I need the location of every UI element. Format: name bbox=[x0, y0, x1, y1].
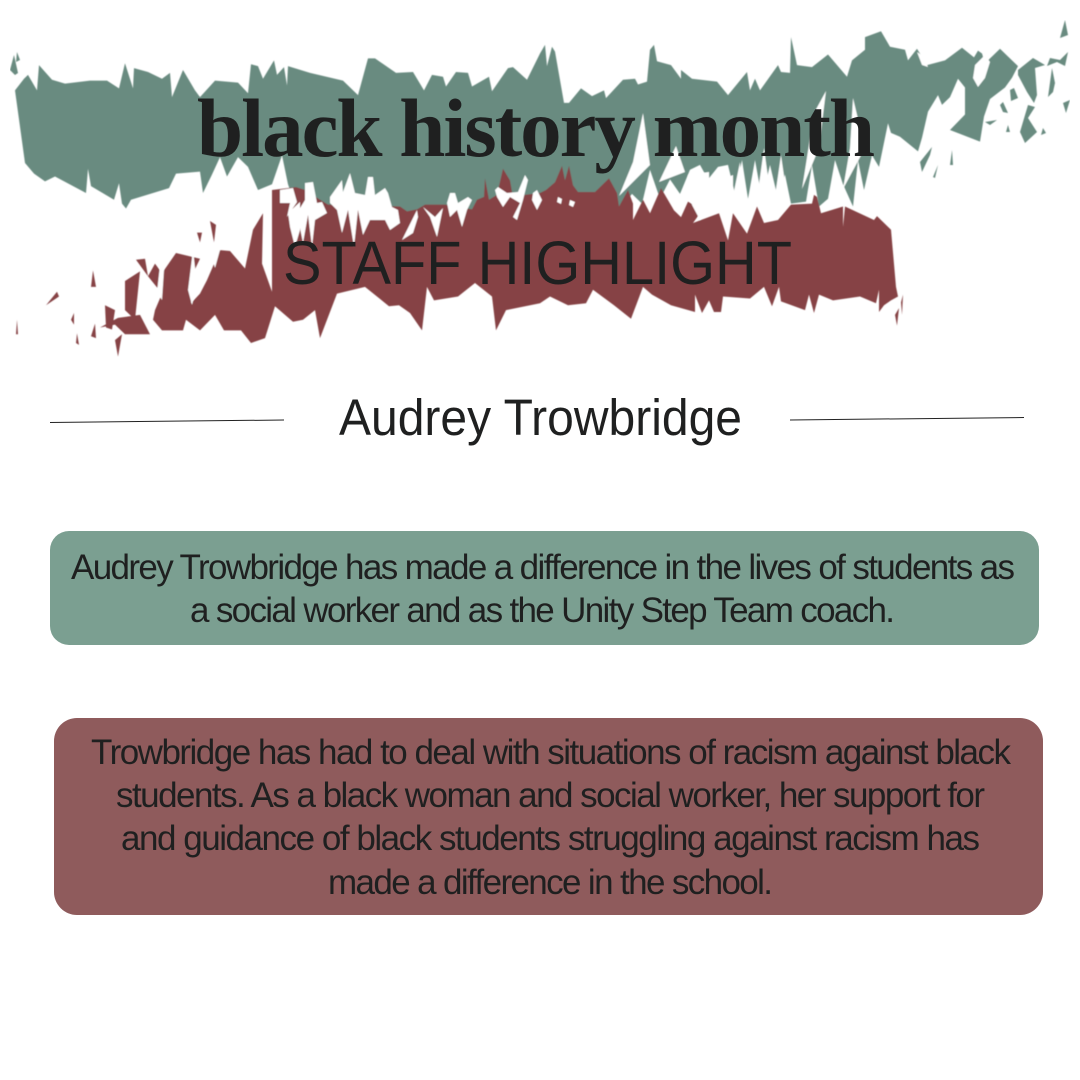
title: black history month bbox=[197, 82, 875, 174]
white flames between brushes bbox=[146, 172, 733, 308]
panel: red detail box bbox=[54, 718, 1043, 915]
panel: green intro box bbox=[50, 531, 1039, 645]
white gaps in green brush bbox=[619, 52, 990, 203]
intro text bbox=[71, 548, 1015, 630]
intro text: a social worker and as the Unity Step Team coach. bbox=[190, 591, 895, 630]
detail text: students. As a black woman and social worker, her support for bbox=[116, 776, 985, 815]
intro text: Audrey Trowbridge has made a difference in the lives of students as bbox=[71, 548, 1015, 587]
icon: green brush stroke bbox=[10, 20, 1070, 218]
detail text bbox=[91, 733, 1012, 902]
detail text: made a difference in the school. bbox=[328, 863, 773, 902]
detail text: and guidance of black students struggling against racism has bbox=[121, 819, 980, 858]
staff name: Audrey Trowbridge bbox=[339, 389, 742, 446]
divider right bbox=[790, 418, 1024, 420]
detail text: Trowbridge has had to deal with situations of racism against black bbox=[91, 733, 1012, 772]
subtitle: STAFF HIGHLIGHT bbox=[283, 229, 792, 297]
icon: red brush stroke bbox=[16, 166, 903, 357]
brush strokes artwork bbox=[10, 20, 1070, 357]
divider left bbox=[50, 420, 284, 422]
